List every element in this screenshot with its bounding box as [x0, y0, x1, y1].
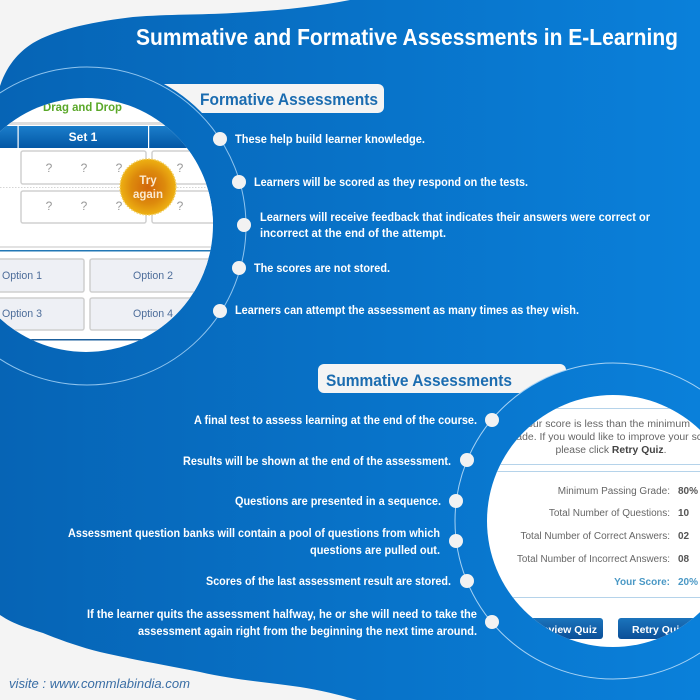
score table: 02 [678, 531, 690, 542]
item 2: Learners will be scored as they respond on the tests. [254, 175, 528, 189]
item 5: Learners can attempt the assessment as many times as they wish. [235, 303, 579, 317]
drop boxes: ? [81, 199, 88, 213]
item 3: Questions are presented in a sequence. [235, 494, 441, 508]
heading: formative assessments: Formative Assessments [200, 90, 378, 109]
option buttons: Option 3 [2, 308, 42, 320]
item 4 [68, 526, 463, 557]
option buttons [0, 259, 220, 330]
panel: summative screenshot circle [480, 395, 700, 647]
score table: Minimum Passing Grade: [558, 486, 670, 497]
drop boxes: ? [177, 161, 184, 175]
summative ring line [455, 363, 700, 679]
drop boxes: ? [46, 199, 53, 213]
score table: 80% [678, 486, 698, 497]
formative list [213, 132, 650, 318]
review quiz button [532, 618, 603, 639]
score table: 20% [678, 577, 698, 588]
drag and drop label: Drag and Drop [43, 102, 122, 114]
drop boxes: ? [116, 161, 123, 175]
drop boxes: ? [46, 161, 53, 175]
score table [517, 486, 698, 588]
panel: formative screenshot circle [0, 98, 222, 352]
drop boxes: ? [177, 199, 184, 213]
item 4: Assessment question banks will contain a pool of questions from which [68, 526, 440, 540]
score table: Total Number of Incorrect Answers: [517, 554, 670, 565]
item 1: A final test to assess learning at the end of the course. [194, 413, 477, 427]
result message: please click Retry Quiz. [556, 445, 666, 456]
item 6: assessment again right from the beginning the next time around. [138, 624, 477, 638]
try again badge: again [133, 189, 163, 201]
heading: summative assessments [318, 363, 700, 679]
heading: summative assessments: Summative Assessments [326, 371, 512, 390]
drop boxes: ? [116, 199, 123, 213]
try again badge [120, 159, 176, 215]
summative list [68, 413, 499, 638]
item 2: Results will be shown at the end of the assessment. [183, 454, 451, 468]
review quiz button: Review Quiz [535, 624, 597, 636]
table header [0, 126, 187, 148]
item 6 [87, 607, 499, 638]
try again badge: Try [139, 175, 157, 187]
item 3 [237, 210, 650, 240]
option buttons: Option 2 [133, 270, 173, 282]
item 6: If the learner quits the assessment halfway, he or she will need to take the [87, 607, 477, 621]
table header: Set 1 [69, 130, 98, 144]
item 4: The scores are not stored. [254, 261, 390, 275]
result message: Your score is less than the minimum [521, 419, 690, 430]
footer url: visite : www.commlabindia.com [9, 676, 190, 691]
drop boxes [0, 151, 222, 223]
item 1: These help build learner knowledge. [235, 132, 425, 146]
item 5: Scores of the last assessment result are stored. [206, 574, 451, 588]
item 4: questions are pulled out. [310, 543, 440, 557]
option buttons: Option 1 [2, 270, 42, 282]
heading: formative assessments [0, 64, 384, 388]
retry quiz button [618, 618, 700, 639]
item 3: incorrect at the end of the attempt. [260, 226, 446, 240]
score table: 10 [678, 508, 690, 519]
item 3: Learners will receive feedback that indicates their answers were correct or [260, 210, 650, 224]
score table: Total Number of Correct Answers: [520, 531, 670, 542]
drop boxes: ? [81, 161, 88, 175]
score table: Total Number of Questions: [549, 508, 670, 519]
score table: 08 [678, 554, 690, 565]
retry quiz button: Retry Quiz [632, 624, 685, 636]
formative ring line [0, 67, 246, 385]
option buttons: Option 4 [133, 308, 173, 320]
result message [507, 419, 700, 456]
score table: Your Score: [614, 577, 670, 588]
